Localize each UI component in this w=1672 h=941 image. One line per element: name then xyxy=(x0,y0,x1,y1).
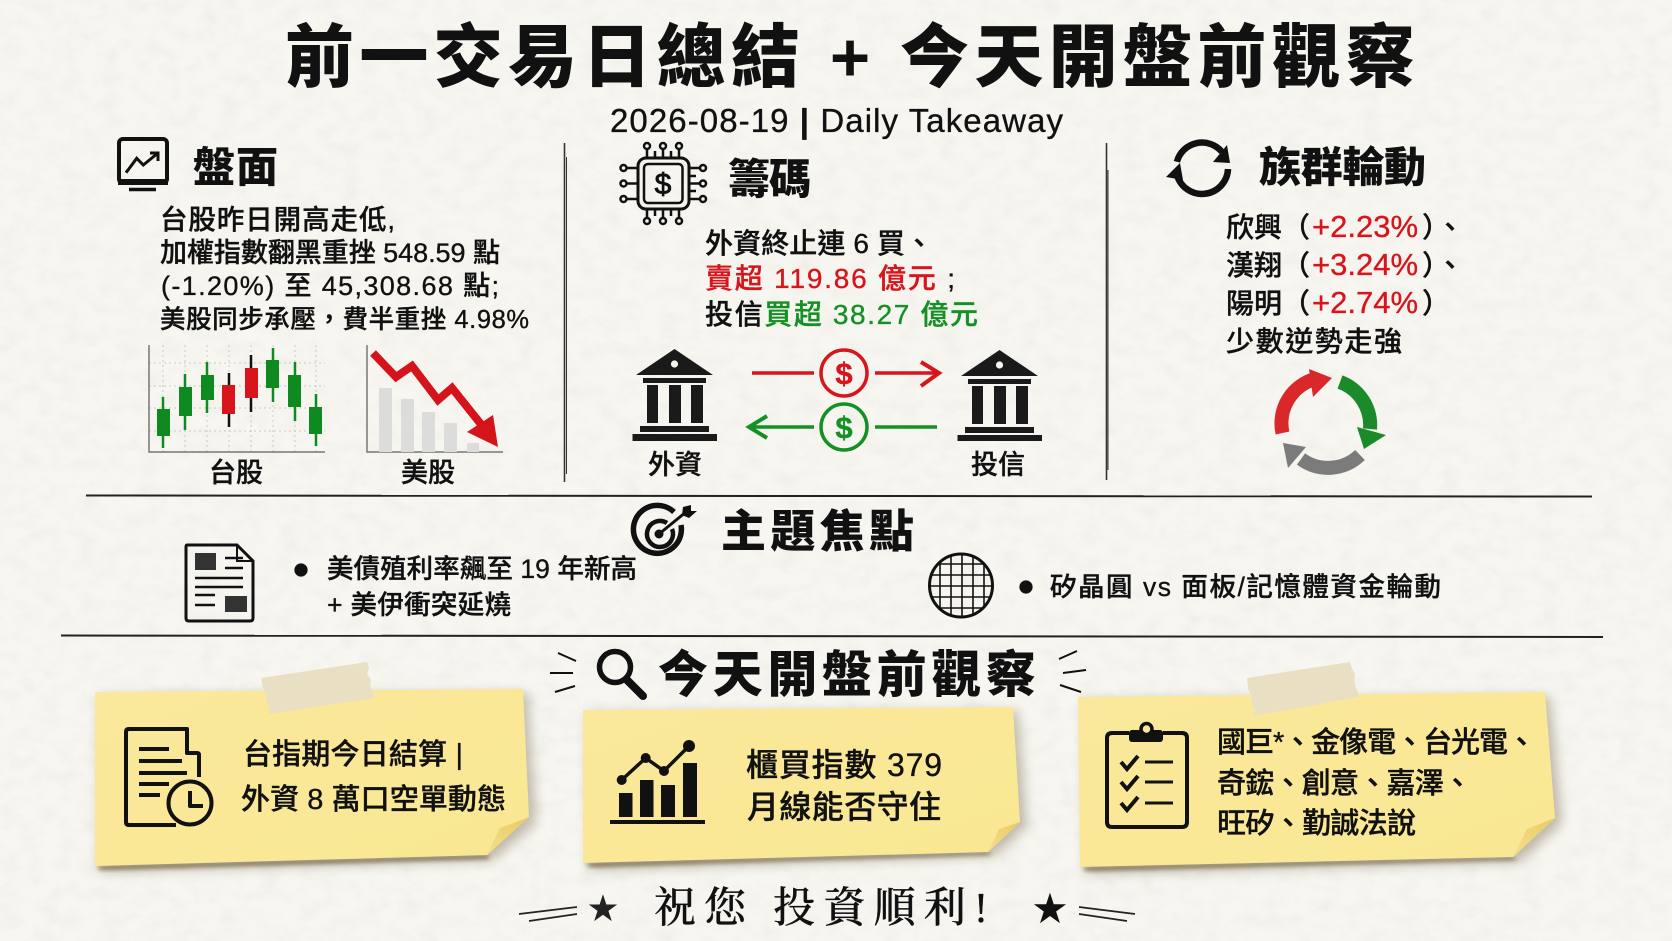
sticky note 3 xyxy=(1078,662,1562,874)
icon: silicon wafer xyxy=(930,553,992,618)
divider xyxy=(1106,143,1108,480)
icon: monitor with trend line xyxy=(118,139,168,190)
text: sector movers: ）、 xyxy=(1422,250,1464,281)
icon: chip with dollar xyxy=(620,143,706,224)
icon: refresh arrows xyxy=(1166,143,1230,194)
divider xyxy=(86,496,1592,497)
text: chip flows xyxy=(705,228,978,330)
footer xyxy=(519,884,1135,933)
heading: 族群輪動: 族群輪動 xyxy=(1259,144,1426,191)
text: chip flows: 外資終止連 6 買、 xyxy=(705,228,933,259)
heading: 籌碼: 籌碼 xyxy=(728,156,811,203)
note paper xyxy=(95,689,529,866)
icon: bank investment trust xyxy=(958,350,1042,441)
note text xyxy=(746,747,942,825)
icon: news document xyxy=(186,545,253,621)
text: market summary: 加權指數翻黑重挫 548.59 點 xyxy=(160,238,500,268)
text: sector movers: 漢翔（ xyxy=(1226,250,1310,281)
chart: Taiwan stock candlesticks xyxy=(149,345,325,452)
text: market summary: (-1.20%) 至 45,308.68 點; xyxy=(161,271,499,301)
panel: 盤面 xyxy=(118,139,529,488)
icon: target with arrow xyxy=(633,505,697,553)
note shadow xyxy=(1082,696,1562,874)
divider xyxy=(564,143,566,482)
note text xyxy=(241,738,506,816)
note text: 月線能否守住 xyxy=(747,789,941,825)
note paper xyxy=(583,707,1020,863)
note text xyxy=(1217,726,1536,840)
date line: 2026-08-19 | Daily Takeaway xyxy=(610,102,1064,139)
tape xyxy=(261,662,375,714)
text: sector movers: +2.23% xyxy=(1312,209,1418,244)
flourish left xyxy=(519,907,577,921)
icon: rays right xyxy=(1059,651,1086,692)
bullet text: bond yield: 美債殖利率飆至 19 年新高 xyxy=(327,554,637,584)
label: 台股: 台股 xyxy=(209,458,263,488)
note paper xyxy=(1078,692,1555,867)
icon: chip with dollar: $ xyxy=(655,168,672,201)
section: 主題焦點 xyxy=(186,505,1441,621)
note shadow xyxy=(585,711,1027,870)
text: sector movers: 陽明（ xyxy=(1226,288,1310,319)
sticky note 2 xyxy=(583,707,1027,870)
note shadow xyxy=(97,694,536,872)
panel: 族群輪動 xyxy=(1166,143,1464,468)
icon: magnifier xyxy=(600,652,643,696)
note text: 外資 8 萬口空單動態 xyxy=(241,783,506,816)
note text: 國巨*、金像電、台光電、 xyxy=(1217,726,1536,759)
icon: rays left xyxy=(550,653,576,692)
arrow: red sell flow xyxy=(752,350,939,396)
arrow: green buy flow xyxy=(749,404,937,450)
icon: rotation cycle arrows xyxy=(1281,369,1386,468)
label: 投信: 投信 xyxy=(971,450,1025,480)
bullet text: wafer rotation: 矽晶圓 vs 面板/記憶體資金輪動 xyxy=(1050,572,1441,602)
label: 外資: 外資 xyxy=(648,450,702,480)
icon: star right: ★ xyxy=(1031,884,1069,933)
heading: 盤面: 盤面 xyxy=(193,144,278,191)
heading: 主題焦點: 主題焦點 xyxy=(721,506,914,557)
note text: 櫃買指數 379 xyxy=(746,747,942,783)
bullet text: bond yield xyxy=(294,554,637,620)
text: sector movers: ） xyxy=(1422,288,1450,319)
text: sector movers: ）、 xyxy=(1422,212,1464,243)
text: sector movers: +3.24% xyxy=(1312,247,1418,282)
note text: 旺矽、勤誠法說 xyxy=(1217,807,1416,840)
text: sector movers: 少數逆勢走強 xyxy=(1226,326,1402,357)
heading text: 今天開盤前觀察 xyxy=(658,647,1036,703)
icon: bank foreign investors xyxy=(632,349,717,441)
section heading: 今天開盤前觀察 xyxy=(550,647,1086,703)
text: market summary: 台股昨日開高走低, xyxy=(160,204,395,235)
footer text: 祝您 投資順利! xyxy=(654,885,988,932)
flourish right xyxy=(1079,907,1135,921)
note fold xyxy=(487,817,529,855)
note text: 台指期今日結算 | xyxy=(243,738,463,771)
icon: document with clock xyxy=(126,729,212,825)
icon: bar and line chart xyxy=(610,740,705,824)
arrow: green buy flow: $ xyxy=(835,410,853,445)
title: 前一交易日總結 + 今天開盤前觀察 xyxy=(285,19,1415,96)
tape xyxy=(1247,662,1359,716)
chart: US stock falling arrow xyxy=(367,345,503,452)
text: sector movers xyxy=(1226,209,1464,357)
note fold xyxy=(1513,818,1555,857)
text: market summary xyxy=(160,204,529,334)
icon: clipboard checklist xyxy=(1107,724,1187,827)
text: chip flows: 賣超 119.86 億元 ; xyxy=(705,263,955,294)
text: sector movers: 欣興（ xyxy=(1226,212,1310,243)
note fold xyxy=(988,822,1020,852)
sticky note 1 xyxy=(95,662,536,872)
arrow: red sell flow: $ xyxy=(835,356,853,391)
note text: 奇鋐、創意、嘉澤、 xyxy=(1217,767,1472,800)
text: chip flows: 投信買超 38.27 億元 xyxy=(705,299,978,330)
icon: star left: ★ xyxy=(586,887,620,930)
divider xyxy=(61,636,1603,637)
label: 美股: 美股 xyxy=(401,458,455,488)
text: sector movers: +2.74% xyxy=(1312,285,1418,320)
text: market summary: 美股同步承壓，費半重挫 4.98% xyxy=(160,306,529,334)
bullet text: bond yield: + 美伊衝突延燒 xyxy=(327,590,511,620)
panel: 籌碼 xyxy=(620,143,1042,480)
